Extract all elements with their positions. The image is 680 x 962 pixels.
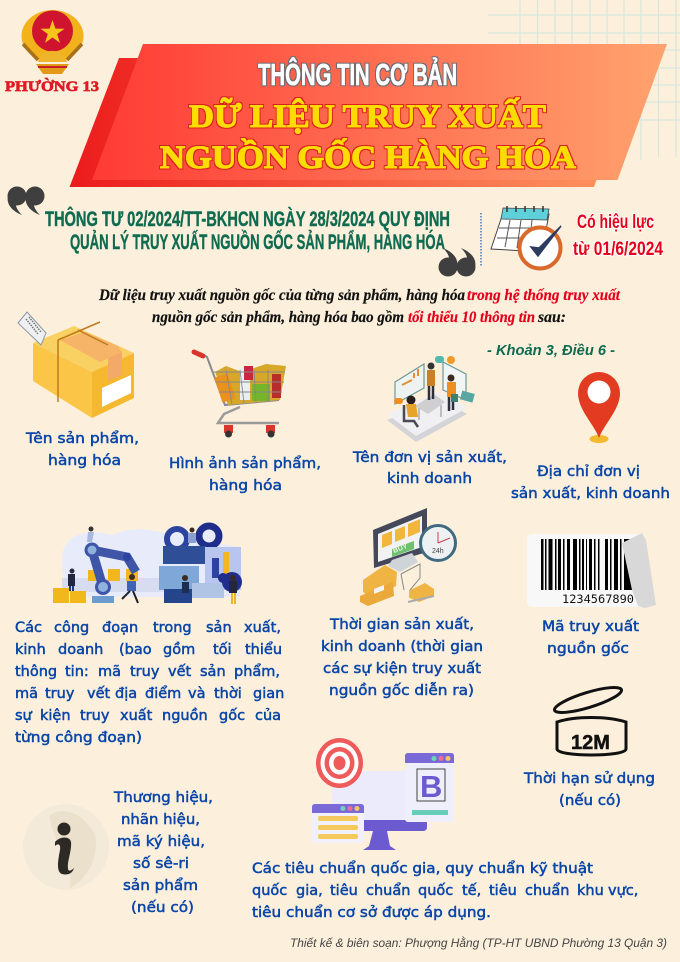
callout: effective date: Có hiệu lực [577, 212, 654, 233]
emblem: national crest and ward name [5, 10, 99, 95]
text block: production stages: tối [213, 641, 232, 658]
icon: location pin [578, 372, 620, 443]
label: brand: mã ký hiệu, [117, 834, 205, 850]
icon: standards screen and target: B [420, 769, 442, 804]
text block: standards: quốc [418, 882, 453, 899]
label: production time: Thời gian sản xuất, [329, 617, 474, 633]
text block: production stages: gồm [163, 641, 195, 658]
label: product image: hàng hóa [209, 478, 282, 494]
icon: 12M open jar [552, 683, 626, 755]
footer credit: Thiết kế & biên soạn: Phượng Hằng (TP-HT UBND Phường 13 Quận 3) [290, 935, 667, 950]
text block: production stages: truy [80, 708, 110, 724]
icon: monitor, clock and boxes [360, 508, 456, 606]
label: producer name: kinh doanh [387, 471, 472, 487]
heading: dữ liệu truy xuất: DỮ LIỆU TRUY XUẤT [189, 96, 546, 135]
text block: standards: tiêu [489, 883, 517, 899]
icon: 12M open jar: 12M [571, 732, 610, 754]
text block: production stages: kinh [15, 642, 46, 658]
icon: standards screen and target [312, 738, 454, 850]
icon: calendar with clock [491, 206, 561, 268]
label: traceability code: Mã truy xuất [542, 619, 639, 635]
icon: monitor, clock and boxes: BUY [392, 543, 409, 555]
icon: monitor, clock and boxes: 24h [432, 548, 444, 555]
callout: effective date: từ 01/6/2024 [573, 239, 663, 260]
text block: production stages: sự [15, 708, 33, 724]
text block: introduction: trong hệ thống truy xuất [467, 287, 621, 304]
text block: production stages: (bao [119, 642, 152, 658]
text block: production stages: Các [15, 620, 42, 636]
text block: standards: Các tiêu chuẩn quốc gia, quy chuẩn kỹ thuật [252, 860, 593, 877]
text block: production stages: phẩm, [234, 663, 280, 680]
text block: introduction: sau: [537, 309, 566, 326]
text block: production stages: xuất, [244, 620, 281, 636]
text block: introduction [98, 287, 621, 326]
label: product name: hàng hóa [48, 453, 121, 469]
icon: opening quote [8, 186, 44, 215]
label: producer address: sản xuất, kinh doanh [511, 486, 670, 502]
text block: standards: tiêu [330, 883, 358, 899]
icon: barcode: 1234567890 [562, 592, 634, 606]
text block: production stages: xuất [120, 708, 153, 724]
text block: production stages: của [255, 708, 281, 724]
text block: circular reference [45, 207, 450, 254]
text block: circular reference: QUẢN LÝ TRUY XUẤT NGUỒN GỐC SẢN PHẨM, HÀNG HÓA [70, 230, 445, 254]
label: expiry: (nếu có) [559, 792, 621, 809]
text block: standards: tế, [462, 882, 481, 899]
text block: production stages: truy [130, 664, 160, 680]
label: brand [113, 790, 213, 916]
text block: production stages: gian [253, 686, 284, 702]
text block: production stages: vết [87, 685, 111, 702]
text block: production stages: thiểu [245, 641, 282, 658]
label: expiry [523, 771, 655, 809]
text block: standards: vực, [608, 883, 638, 899]
text block: production stages: trong [153, 620, 192, 636]
label: producer name: Tên đơn vị sản xuất, [352, 450, 507, 466]
label: brand: (nếu có) [131, 899, 194, 916]
label: producer address: Địa chỉ đơn vị [537, 464, 640, 480]
text block: production stages: đoạn [102, 620, 138, 636]
text block: production stages: kiện [40, 708, 71, 724]
label: product name: Tên sản phẩm, [25, 430, 139, 447]
text block: standards: quốc [252, 882, 287, 899]
text block: production stages: sản [200, 664, 226, 680]
icon: barcode [527, 533, 656, 608]
text block: production stages: mã [98, 664, 121, 680]
label: brand: nhãn hiệu, [121, 812, 200, 828]
text block: production stages: địa [115, 686, 137, 702]
text block: production stages: tin: [65, 664, 89, 680]
text block: introduction: nguồn gốc sản phẩm, hàng hóa bao gồm [152, 309, 404, 326]
label: brand: số sê-ri [133, 855, 189, 872]
text block: introduction: tối thiểu 10 thông tin [408, 309, 535, 326]
emblem: national crest and ward name: PHƯỜNG 13 [5, 78, 99, 95]
text block: circular reference: THÔNG TƯ 02/2024/TT-BKHCN NGÀY 28/3/2024 QUY ĐỊNH [45, 207, 450, 231]
title banner [70, 44, 667, 187]
text block: production stages [15, 620, 284, 746]
label: production time: kinh doanh (thời gian [321, 639, 483, 655]
text block: production stages: truy [45, 686, 75, 702]
label: production time [321, 617, 483, 699]
text block: introduction: Dữ liệu truy xuất nguồn gốc của từng sản phẩm, hàng hóa [98, 287, 465, 304]
label: production time: các sự kiện truy xuất [323, 661, 481, 677]
label: expiry: Thời hạn sử dụng [523, 771, 655, 787]
label: producer address [511, 464, 670, 502]
text block: production stages: thời [214, 686, 242, 702]
text block: production stages: và [188, 686, 205, 702]
label: production time: nguồn gốc diễn ra) [329, 682, 474, 699]
label: product image: Hình ảnh sản phẩm, [169, 455, 321, 472]
text block: production stages: gốc [219, 707, 245, 724]
icon: shopping cart [194, 352, 286, 438]
icon: parcel box [18, 312, 134, 418]
text block: production stages: điểm [145, 685, 181, 702]
label: traceability code: nguồn gốc [547, 640, 629, 657]
text block: production stages: công [54, 620, 89, 636]
text block: standards [252, 860, 638, 921]
label: producer name [352, 450, 507, 487]
text block: standards: chuẩn [525, 882, 569, 899]
callout: effective date [573, 212, 663, 260]
label: traceability code [542, 619, 639, 657]
text block: standards: gia, [296, 883, 323, 899]
text block: production stages: sản [206, 620, 232, 636]
icon: closing quote [438, 248, 476, 276]
citation: clause reference: - Khoản 3, Điều 6 - [487, 342, 615, 359]
text block: production stages: nguồn [162, 707, 208, 724]
label: brand: Thương hiệu, [113, 790, 213, 806]
text block: production stages: doanh [58, 642, 103, 658]
text block: production stages: mã [15, 686, 38, 702]
heading: thông tin cơ bản: THÔNG TIN CƠ BẢN [258, 56, 457, 92]
text block: standards: tiêu chuẩn cơ sở được áp dụng. [252, 904, 491, 921]
icon: business team [387, 356, 475, 442]
text block: standards: chuẩn [366, 882, 410, 899]
text block: production stages: từng công đoạn) [15, 730, 142, 746]
label: brand: sản phẩm [123, 877, 198, 894]
text block: production stages: thông [15, 664, 57, 680]
text block: standards: khu [577, 883, 604, 899]
label: product image [169, 455, 321, 494]
heading: nguồn gốc hàng hóa: NGUỒN GỐC HÀNG HÓA [160, 137, 576, 176]
icon: information [23, 804, 109, 890]
text block: production stages: vết [168, 663, 192, 680]
label: product name [25, 430, 139, 469]
icon: production line [53, 526, 242, 604]
